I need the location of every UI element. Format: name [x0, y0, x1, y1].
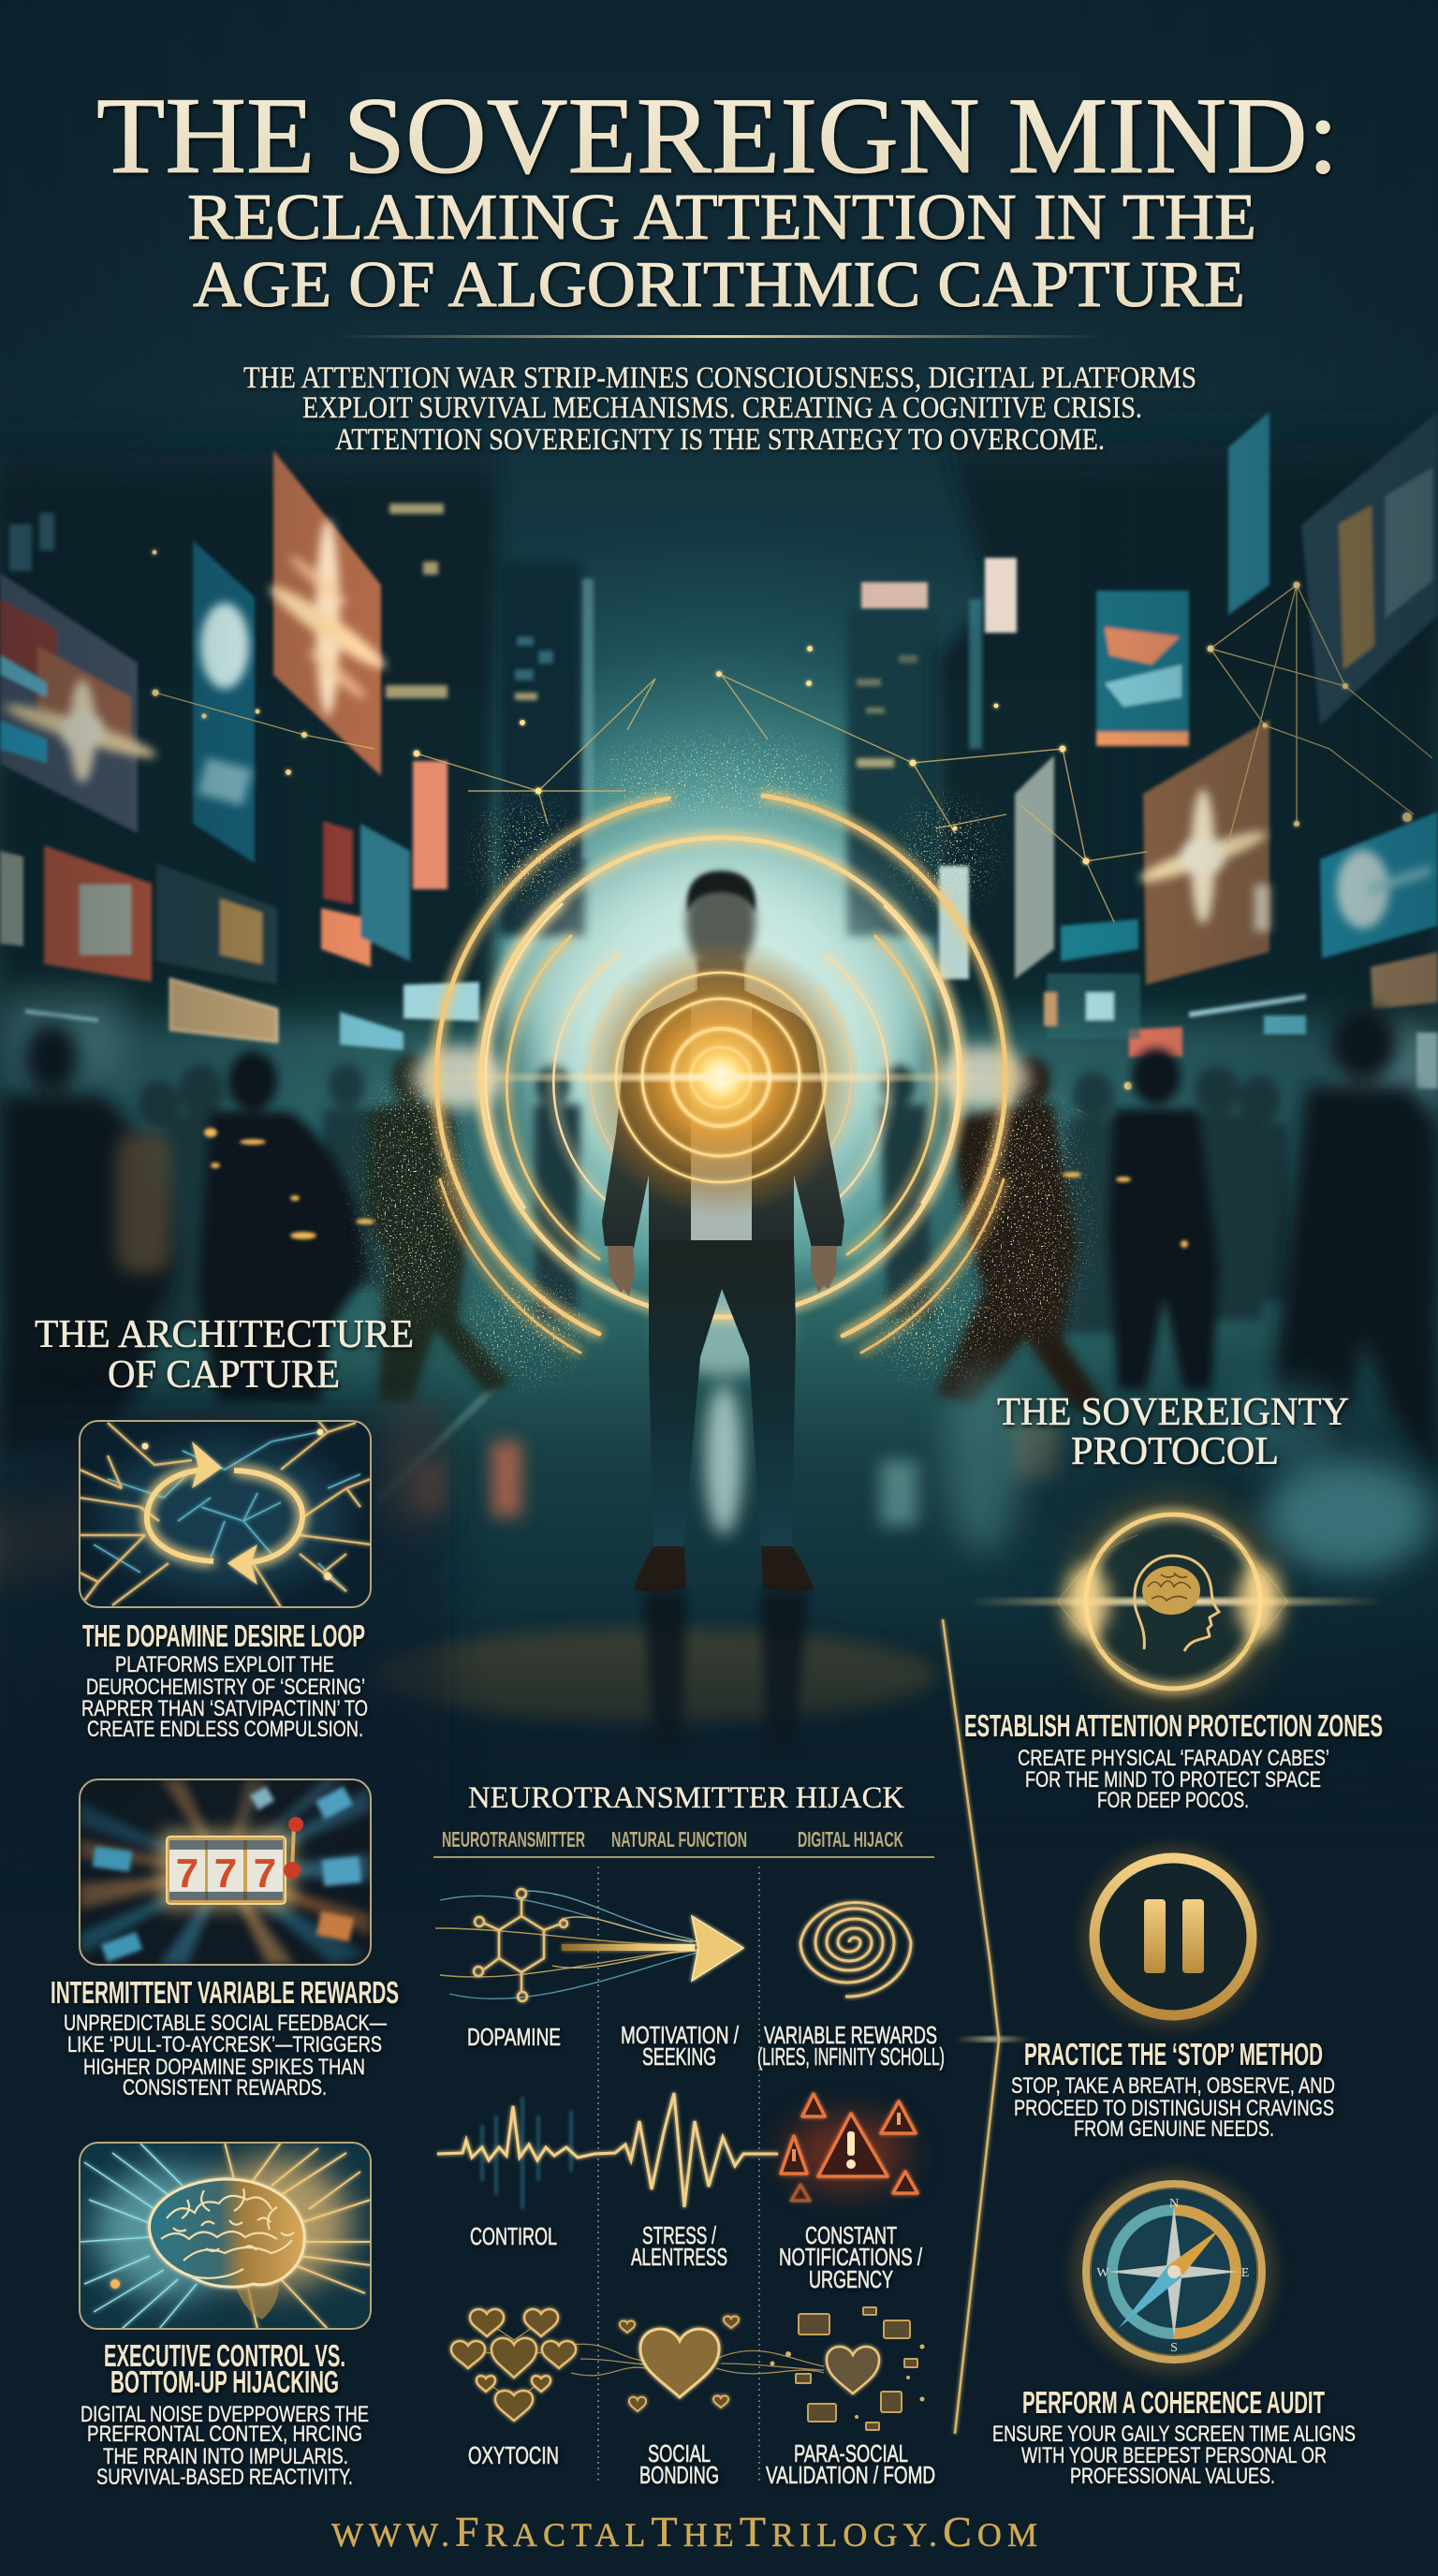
network lines — [155, 585, 1432, 1178]
labels: row 1: VARIABLE REWARDS — [764, 2021, 937, 2049]
street floor — [0, 1254, 1438, 1760]
card: slot machine image: 7 — [176, 1851, 198, 1896]
heading: sovereignty: THE SOVEREIGNTY — [997, 1391, 1349, 1434]
heading: architecture — [35, 1313, 414, 1397]
text: attention protection zones — [964, 1708, 1383, 1813]
dark street edges — [0, 1413, 1414, 1619]
gold sparks on crowd — [204, 1128, 1188, 1248]
labels: row 1 — [467, 2021, 945, 2071]
icon: warning triangles — [781, 2094, 917, 2201]
icon: compass — [1073, 2171, 1275, 2373]
icon: spiral — [800, 1902, 911, 1997]
table heading: NEUROTRANSMITTER HIJACK — [468, 1781, 904, 1815]
labels: row 2: URGENCY — [809, 2265, 893, 2293]
labels: row 2: CONTIROL — [470, 2222, 557, 2250]
labels: row 3: PARA-SOCIAL — [794, 2439, 908, 2467]
hair — [687, 871, 756, 913]
text: dopamine desire loop — [81, 1618, 368, 1742]
icon: dopamine molecule — [474, 1889, 567, 2001]
card: slot machine image — [80, 1779, 371, 1965]
street haze band — [0, 992, 1438, 1301]
labels: row 2: ALENTRESS — [631, 2243, 727, 2271]
panel: sovereignty protocol — [964, 1391, 1385, 2489]
shirt — [691, 1002, 752, 1240]
text: attention protection zones: FOR THE MIND TO PROTECT SPACE — [1025, 1767, 1321, 1793]
right billboard glows — [1137, 789, 1432, 931]
hero: energy rings behind figure — [436, 796, 1005, 1353]
icon: connector lines row 3 — [470, 2321, 824, 2401]
heading: sovereignty — [997, 1391, 1349, 1473]
intro text: ATTENTION SOVEREIGNTY IS THE STRATEGY TO OVERCOME. — [335, 423, 1105, 457]
network nodes — [152, 550, 1412, 1249]
divider: gold chevron — [943, 1619, 1030, 2434]
text: executive control: BOTTOM-UP HIJACKING — [110, 2364, 339, 2399]
text: attention protection zones: FOR DEEP POCOS. — [1097, 1788, 1249, 1813]
labels: row 3: SOCIAL — [648, 2439, 711, 2467]
hero: standing figure — [412, 871, 1030, 1592]
text: intermittent variable rewards: CONSISTENT REWARDS. — [123, 2075, 327, 2100]
labels: row 3: VALIDATION / FOMD — [766, 2461, 935, 2489]
text: stop method — [1011, 2037, 1335, 2142]
distant crowd — [119, 1063, 1293, 1334]
crowd silhouettes — [0, 1006, 1438, 1479]
hero: ring flare ends — [412, 1046, 1030, 1109]
figure reflection — [644, 1591, 808, 1750]
intro text: THE ATTENTION WAR STRIP-MINES CONSCIOUSNESS, DIGITAL PLATFORMS — [243, 361, 1196, 395]
backpack — [116, 1133, 170, 1273]
footer url: WWW.FRACTALTHETRILOGY.COM — [331, 2508, 1037, 2555]
buildings — [0, 402, 1438, 1076]
figure golden left — [367, 1054, 510, 1404]
figure left mid — [198, 1051, 367, 1402]
text: intermittent variable rewards: UNPREDICTABLE SOCIAL FEEDBACK— — [64, 2011, 387, 2036]
labels: row 2 — [470, 2221, 923, 2293]
neck — [697, 959, 744, 1002]
labels: row 2: STRESS / — [642, 2221, 717, 2249]
labels: row 3: BONDING — [639, 2461, 719, 2489]
text: stop method: STOP, TAKE A BREATH, OBSERVE, AND — [1011, 2073, 1335, 2099]
trousers — [649, 1240, 796, 1549]
lower background — [0, 1853, 1438, 2576]
column headers: DIGITAL HIJACK — [798, 1827, 903, 1852]
title block — [96, 76, 1339, 321]
text: dopamine desire loop: DEUROCHEMISTRY OF ‘SCERING’ — [86, 1675, 365, 1700]
icon: compass: S — [1170, 2341, 1178, 2355]
text: coherence audit: PROFESSIONAL VALUES. — [1070, 2464, 1275, 2489]
sparks around rings — [337, 717, 1109, 1402]
figure right foreground — [1269, 1006, 1438, 1479]
street streak — [377, 1388, 493, 1501]
labels: row 2: CONSTANT — [805, 2221, 897, 2249]
labels: row 1: MOTIVATION / — [621, 2021, 740, 2049]
column headers — [442, 1827, 903, 1852]
card: brain image — [80, 2143, 371, 2329]
title line 2: RECLAIMING ATTENTION IN THE — [187, 182, 1256, 254]
icon: pause — [1083, 1847, 1263, 2027]
horizontal flare — [412, 1074, 1030, 1081]
column headers: NATURAL FUNCTION — [611, 1827, 747, 1852]
text: dopamine desire loop: RAPRER THAN ‘SATVIPACTINN’ TO — [81, 1696, 368, 1721]
text: intermittent variable rewards: INTERMITTENT VARIABLE REWARDS — [51, 1975, 399, 2010]
icon: social bonding heart — [620, 2316, 739, 2411]
text: dopamine desire loop: PLATFORMS EXPLOIT THE — [115, 1652, 334, 1677]
intro text: EXPLOIT SURVIVAL MECHANISMS. CREATING A COGNITIVE CRISIS. — [302, 391, 1142, 425]
arrow: motivation — [562, 1916, 743, 1981]
icon: blue signal spikes — [482, 2097, 571, 2209]
text: intermittent variable rewards — [51, 1975, 399, 2100]
right billboards — [861, 412, 1438, 1089]
heading: architecture: THE ARCHITECTURE — [35, 1313, 414, 1356]
panel streak background — [0, 1367, 1432, 1598]
card: slot machine image: 7 — [214, 1851, 237, 1896]
title line 3: AGE OF ALGORITHMIC CAPTURE — [193, 249, 1245, 321]
labels: row 1: (LIRES, INFINITY SCHOLL) — [757, 2042, 945, 2071]
text: coherence audit — [992, 2385, 1356, 2489]
icon: flow streams — [435, 1891, 697, 1998]
card: slot machine image: 7 — [254, 1851, 276, 1896]
figure right mid — [1108, 1048, 1219, 1390]
panel: architecture of capture — [35, 1313, 414, 2490]
chest rings — [616, 973, 826, 1182]
text: executive control: PREFRONTAL CONTEX, HRCING — [87, 2422, 362, 2447]
panel: neurotransmitter table — [433, 1781, 945, 2489]
jacket — [602, 973, 844, 1248]
icon: oxytocin hearts — [451, 2309, 576, 2421]
blurred head — [686, 872, 756, 973]
icon: para-social heart and bubbles — [770, 2307, 925, 2430]
text: attention protection zones: CREATE PHYSICAL ‘FARADAY CABES’ — [1018, 1746, 1329, 1771]
text: coherence audit: WITH YOUR BEEPEST PERSONAL OR — [1021, 2443, 1327, 2468]
icon: compass: E — [1241, 2266, 1249, 2280]
text: dopamine desire loop: CREATE ENDLESS COMPULSION. — [87, 1717, 363, 1742]
text: intermittent variable rewards: HIGHER DOPAMINE SPIKES THAN — [83, 2055, 365, 2080]
text: executive control: THE RRAIN INTO IMPULARIS. — [103, 2444, 348, 2469]
chart: stress pulse line — [437, 2093, 778, 2207]
labels: row 2: NOTIFICATIONS / — [779, 2243, 923, 2271]
labels: row 3 — [468, 2439, 935, 2489]
left column shade — [0, 1404, 449, 1872]
figure golden right — [936, 1057, 1105, 1413]
icon: compass: W — [1096, 2266, 1109, 2280]
icon: shielded mind — [968, 1497, 1385, 1706]
text: executive control — [81, 2338, 369, 2490]
text: stop method: PROCEED TO DISTINGUISH CRAVINGS — [1014, 2096, 1334, 2121]
text: dopamine desire loop: THE DOPAMINE DESIRE LOOP — [82, 1618, 365, 1653]
title line 1: THE SOVEREIGN MIND: — [96, 76, 1339, 197]
card: dopamine loop image — [80, 1421, 371, 1607]
street reflections — [374, 1282, 1058, 1722]
bottom fade — [0, 1610, 1438, 1853]
shoes — [634, 1546, 814, 1592]
labels: row 1: DOPAMINE — [467, 2023, 561, 2051]
left billboards — [0, 450, 479, 1050]
heading: architecture: OF CAPTURE — [108, 1354, 340, 1397]
icon: compass: N — [1169, 2197, 1179, 2211]
text: intermittent variable rewards: LIKE ‘PULL-TO-AYCRESK’—TRIGGERS — [67, 2032, 382, 2057]
column headers: NEUROTRANSMITTER — [442, 1827, 585, 1852]
intro text — [243, 361, 1196, 457]
labels: row 1: SEEKING — [642, 2042, 716, 2071]
text: stop method: FROM GENUINE NEEDS. — [1074, 2116, 1274, 2142]
figure left foreground — [0, 1024, 174, 1451]
chest glow — [580, 937, 861, 1218]
labels: row 3: OXYTOCIN — [468, 2441, 559, 2469]
heading: sovereignty: PROTOCOL — [1071, 1430, 1279, 1473]
left billboard glows — [2, 520, 391, 806]
text: executive control: SURVIVAL-BASED REACTIVITY. — [96, 2465, 353, 2490]
text: executive control: DIGITAL NOISE DVEPPOWERS THE — [81, 2402, 369, 2427]
core — [687, 1044, 755, 1111]
pale halo behind figure — [524, 842, 917, 1161]
hands — [608, 1246, 837, 1296]
text: executive control: EXECUTIVE CONTROL VS. — [104, 2338, 345, 2373]
